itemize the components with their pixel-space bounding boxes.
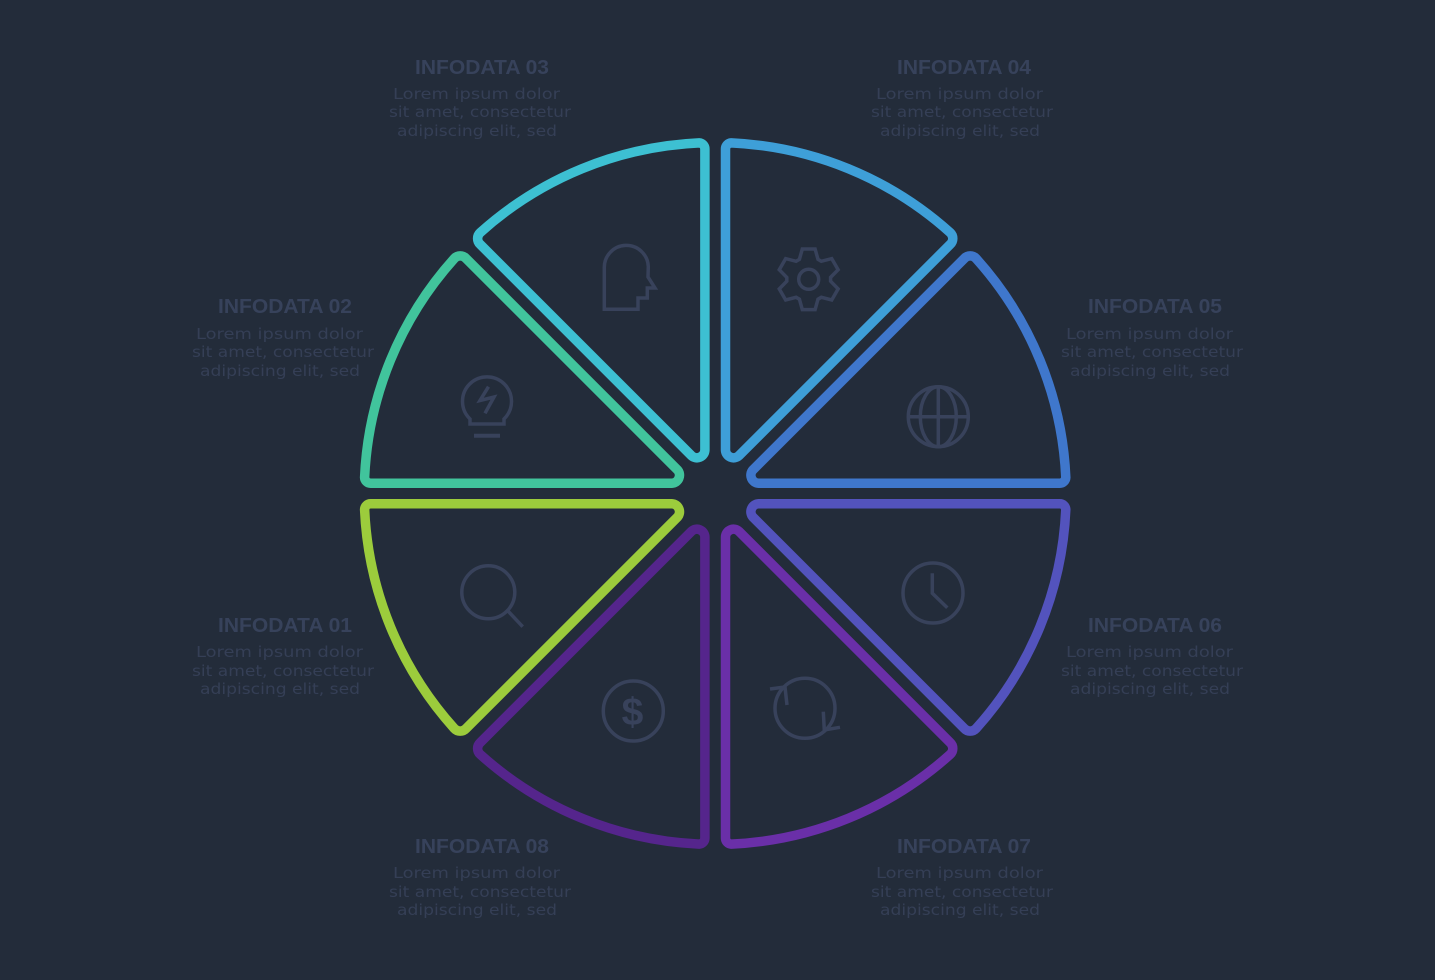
text block: INFODATA 07: INFODATA 07 <box>897 836 1031 858</box>
text block: INFODATA 07 <box>871 836 1054 919</box>
text block: INFODATA 01 <box>192 615 375 698</box>
icon: clock <box>903 563 963 623</box>
text block: INFODATA 02 <box>192 296 375 380</box>
text block: INFODATA 05: Lorem ipsum dolor <box>1066 325 1234 343</box>
text block: INFODATA 01: adipiscing elit, sed <box>200 680 360 698</box>
slice 03: cyan <box>478 143 705 458</box>
text block: INFODATA 06: Lorem ipsum dolor <box>1066 643 1234 661</box>
text block: INFODATA 02: sit amet, consectetur <box>192 343 375 361</box>
text block: INFODATA 05 <box>1061 296 1244 380</box>
text block: INFODATA 05: sit amet, consectetur <box>1061 343 1244 361</box>
text block: INFODATA 02: adipiscing elit, sed <box>200 362 360 380</box>
slice 07: purple <box>726 529 953 844</box>
text block: INFODATA 04: adipiscing elit, sed <box>880 122 1040 140</box>
slice 01: lime <box>365 504 680 731</box>
icon: dollar coin: $ <box>622 691 644 734</box>
text block: INFODATA 08: INFODATA 08 <box>415 836 549 858</box>
text block: INFODATA 07: adipiscing elit, sed <box>880 901 1040 919</box>
icon: gear <box>779 249 838 310</box>
text block: INFODATA 06 <box>1061 615 1244 698</box>
text block: INFODATA 07: sit amet, consectetur <box>871 883 1054 901</box>
text block: INFODATA 06: adipiscing elit, sed <box>1070 680 1230 698</box>
slice 08: dark purple <box>478 529 705 844</box>
text block: INFODATA 02: Lorem ipsum dolor <box>196 325 364 343</box>
text block: INFODATA 03: INFODATA 03 <box>415 57 549 79</box>
text block: INFODATA 08: sit amet, consectetur <box>389 883 572 901</box>
icon: dollar coin <box>603 681 663 741</box>
slice 02: green <box>365 256 680 483</box>
text block: INFODATA 06: sit amet, consectetur <box>1061 662 1244 680</box>
text block: INFODATA 01: Lorem ipsum dolor <box>196 643 364 661</box>
text block: INFODATA 08: Lorem ipsum dolor <box>393 864 561 882</box>
text block: INFODATA 05: adipiscing elit, sed <box>1070 362 1230 380</box>
text block: INFODATA 01: sit amet, consectetur <box>192 662 375 680</box>
text block: INFODATA 06: INFODATA 06 <box>1088 615 1222 637</box>
icon: globe <box>908 387 968 447</box>
slice 06: indigo <box>751 504 1066 731</box>
text block: INFODATA 04: INFODATA 04 <box>897 57 1032 79</box>
text block: INFODATA 03: Lorem ipsum dolor <box>393 85 561 103</box>
text block: INFODATA 04: sit amet, consectetur <box>871 103 1054 121</box>
icon: head profile <box>604 245 655 309</box>
text block: INFODATA 05: INFODATA 05 <box>1088 296 1222 318</box>
slice 05: blue <box>751 256 1066 483</box>
text block: INFODATA 03 <box>389 57 572 140</box>
text block: INFODATA 03: sit amet, consectetur <box>389 103 572 121</box>
text block: INFODATA 03: adipiscing elit, sed <box>397 122 557 140</box>
text block: INFODATA 08 <box>389 836 572 919</box>
text block: INFODATA 08: adipiscing elit, sed <box>397 901 557 919</box>
text block: INFODATA 04 <box>871 57 1054 140</box>
icon: refresh arrows <box>770 678 840 738</box>
text block: INFODATA 07: Lorem ipsum dolor <box>876 864 1044 882</box>
text block: INFODATA 04: Lorem ipsum dolor <box>876 85 1044 103</box>
icon: light bulb with bolt <box>462 377 512 436</box>
icon: magnifying glass <box>462 566 523 627</box>
text block: INFODATA 02: INFODATA 02 <box>218 296 352 318</box>
slice 04: sky blue <box>726 143 953 458</box>
text block: INFODATA 01: INFODATA 01 <box>218 615 352 637</box>
pie wheel of eight slices <box>365 143 1066 844</box>
